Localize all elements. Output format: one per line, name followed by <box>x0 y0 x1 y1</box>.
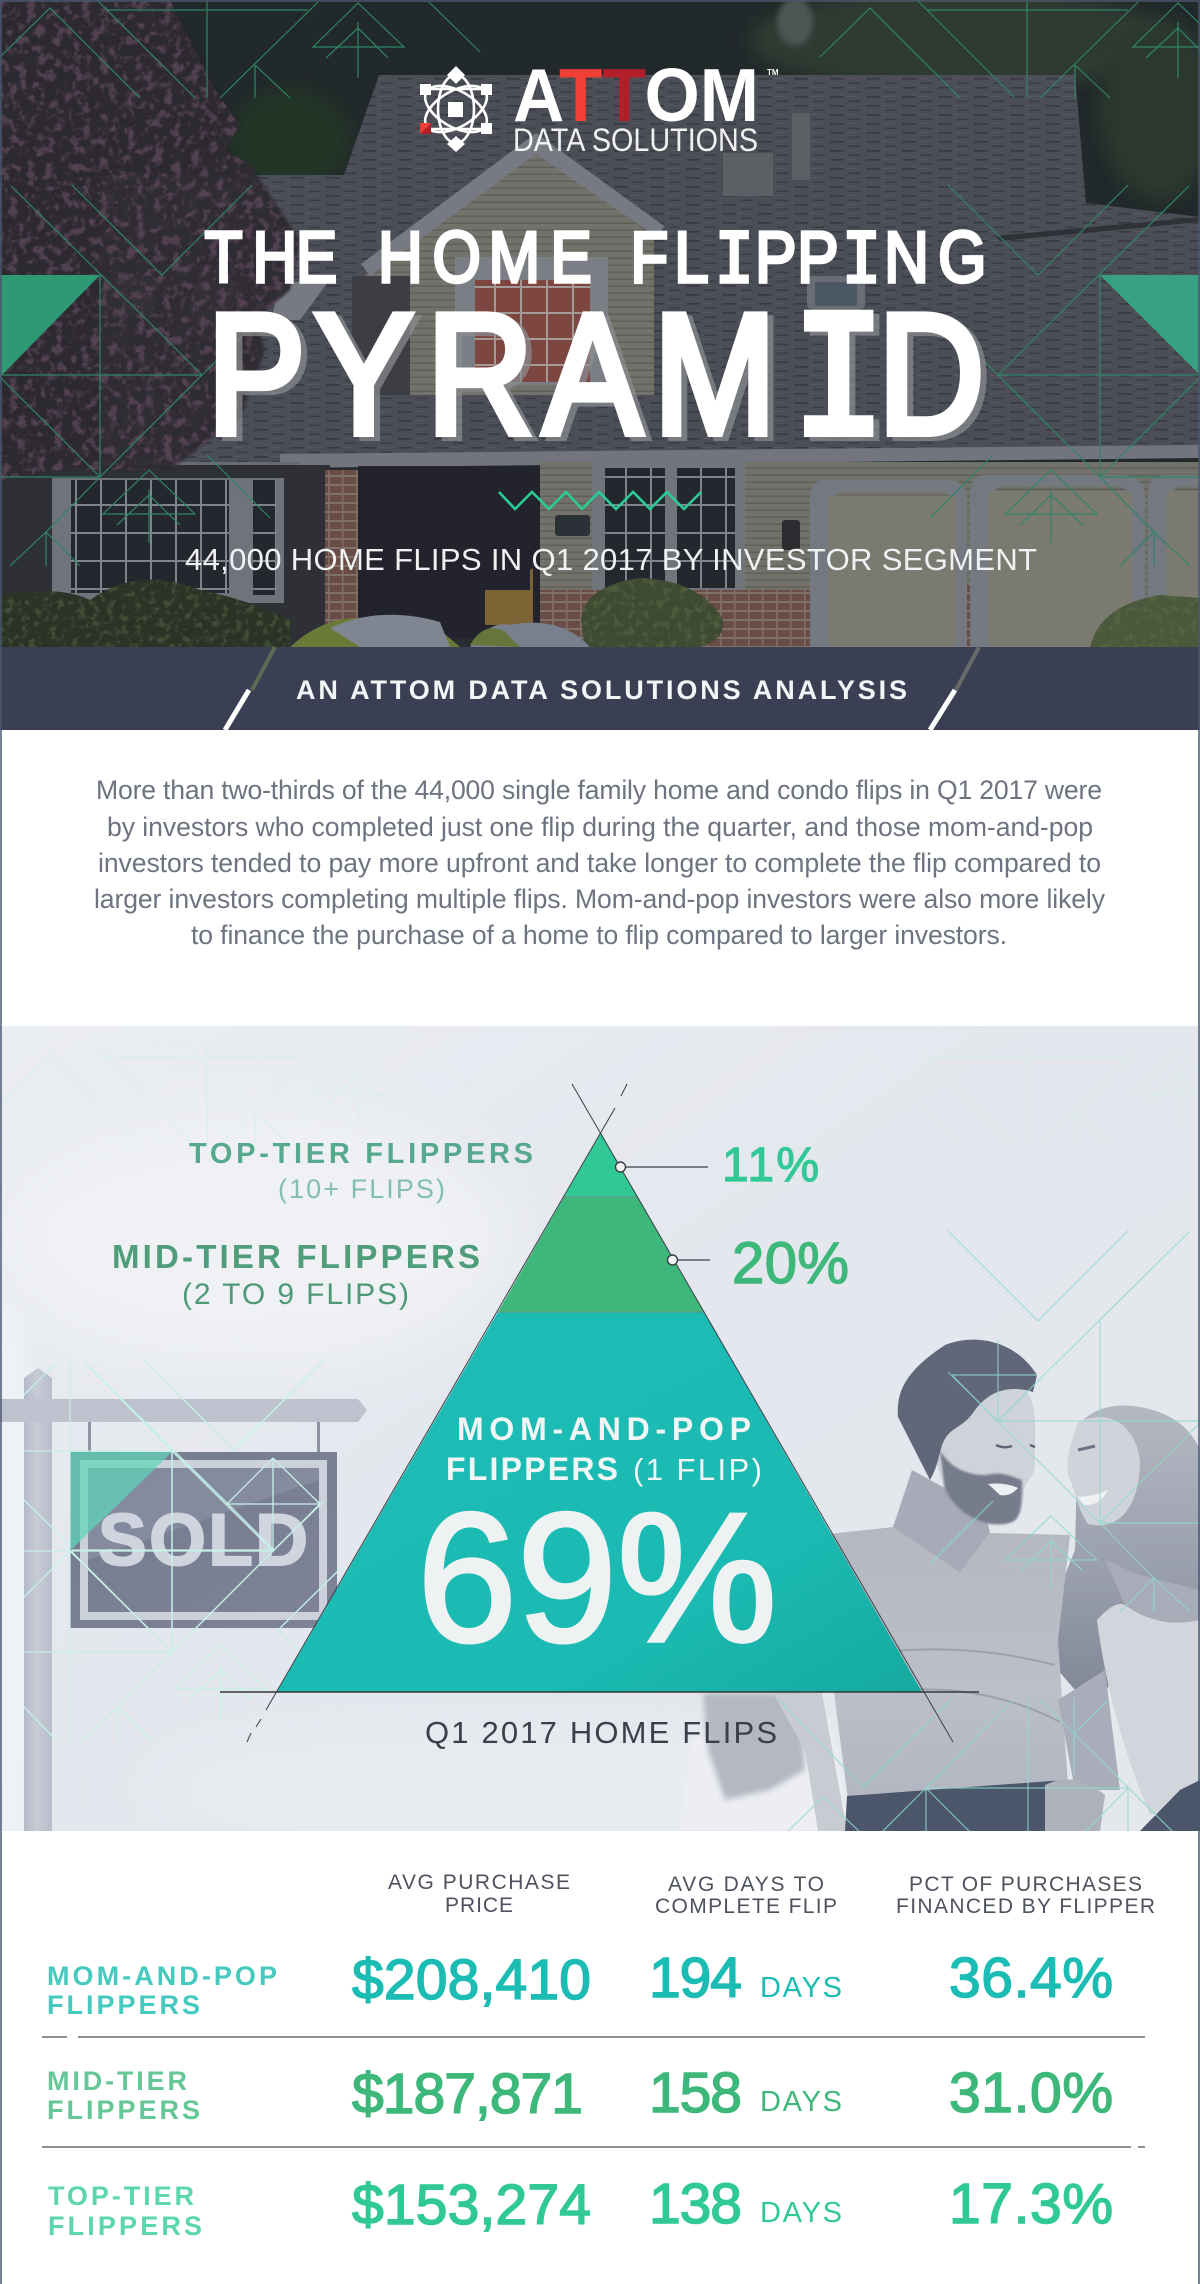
man's neck <box>893 1470 990 1573</box>
man's smile <box>988 1484 1018 1495</box>
title line one: FL <box>630 218 709 298</box>
top tier percent: 11% <box>722 1139 819 1192</box>
pyramid chart <box>220 1084 979 1742</box>
central window <box>455 257 608 385</box>
title line two: PYRAM <box>207 279 776 469</box>
avg days: DAYS <box>760 2197 842 2229</box>
column header: days <box>655 1873 837 1918</box>
woman's brow and smile <box>1078 1446 1095 1450</box>
column header: financed: FINANCED BY FLIPPER <box>896 1895 1155 1918</box>
avg days <box>649 2061 842 2125</box>
icon: ATTOM atom mark <box>418 66 494 152</box>
woman's chest <box>1105 1560 1200 1623</box>
man's shirt <box>820 1527 1070 1800</box>
avg days <box>649 1946 842 2010</box>
man's hand <box>703 1693 805 1800</box>
stats table <box>42 1871 1155 2241</box>
title line two: I <box>792 282 885 488</box>
pyramid mom-and-pop label: (1 FLIP) <box>633 1452 762 1487</box>
row label: FLIPPERS <box>48 2211 202 2241</box>
sign arm <box>0 1399 367 1422</box>
sign word: SOLD <box>98 1500 308 1581</box>
sofa <box>680 1713 850 1831</box>
panel background <box>0 1026 1200 1831</box>
header photo: house with trees <box>0 0 1200 647</box>
row label: FLIPPERS <box>47 1990 200 2020</box>
soft glow background <box>0 1110 850 1900</box>
pct financed: 17.3% <box>949 2172 1113 2236</box>
row label: TOP-TIER <box>48 2181 194 2211</box>
left dormer skylights <box>273 282 326 320</box>
row label: MID-TIER <box>47 2066 187 2096</box>
title line one: I <box>842 220 881 306</box>
teal corner <box>70 1452 172 1551</box>
woman's top <box>1097 1604 1200 1815</box>
intro paragraph: larger investors completing multiple flips. Mom-and-pop investors were also more likely <box>94 884 1106 914</box>
column header: price: AVG PURCHASE <box>388 1871 570 1894</box>
column header: financed <box>896 1873 1155 1918</box>
sign board <box>70 1452 337 1628</box>
bottom tier: mom-and-pop <box>277 1312 922 1692</box>
brick base <box>540 590 810 647</box>
decorative green triangle right <box>1100 275 1200 375</box>
callout: top tier dot <box>616 1162 708 1172</box>
pyramid big percent: 69% <box>417 1474 777 1680</box>
mid tier label <box>112 1238 480 1311</box>
callout: mid tier dot <box>668 1255 710 1265</box>
left windows <box>52 478 284 603</box>
upper roof <box>100 75 1200 465</box>
woman's face <box>1067 1417 1140 1525</box>
title line one: HOME <box>378 218 592 298</box>
title line one: I <box>715 220 754 306</box>
middle tier <box>498 1197 704 1312</box>
tier separators <box>498 1197 704 1312</box>
avg days: 138 <box>649 2172 742 2236</box>
avg price: $187,871 <box>352 2062 583 2126</box>
gable wall <box>352 152 654 395</box>
geometric line pattern <box>0 0 1200 566</box>
man's beard <box>940 1450 1022 1524</box>
garage doors <box>810 480 967 647</box>
subtitle: 44,000 HOME FLIPS IN Q1 2017 BY INVESTOR SEGMENT <box>185 542 1037 577</box>
avg price: $153,274 <box>352 2173 591 2237</box>
brick column <box>325 470 358 624</box>
divider one <box>42 2036 1145 2038</box>
mailbox <box>555 515 590 536</box>
column header: financed: PCT OF PURCHASES <box>909 1873 1142 1896</box>
woman's arm <box>1058 1670 1120 1790</box>
shrubs <box>0 580 290 647</box>
mid tier label: (2 TO 9 FLIPS) <box>182 1278 409 1311</box>
pyramid caption: Q1 2017 HOME FLIPS <box>425 1715 777 1750</box>
right window <box>592 462 745 594</box>
header panel <box>0 0 1200 730</box>
logo wordmark: ATTOM <box>513 53 759 137</box>
intro paragraph: to finance the purchase of a home to flip compared to larger investors. <box>191 920 1007 950</box>
small round window <box>807 276 865 310</box>
row label: FLIPPERS <box>47 2095 200 2125</box>
avg days: DAYS <box>760 1972 842 2004</box>
sign post <box>24 1368 52 1831</box>
logo <box>418 53 779 158</box>
man's eyes <box>996 1445 1035 1447</box>
logo trademark: TM <box>767 68 779 77</box>
avg days <box>649 2172 842 2236</box>
photo: couple <box>680 1340 1200 1831</box>
pyramid mom-and-pop label <box>446 1411 762 1487</box>
intro paragraph: More than two-thirds of the 44,000 single family home and condo flips in Q1 2017 were <box>96 775 1102 805</box>
title line one: THE <box>205 218 337 298</box>
man's ear <box>919 1422 939 1458</box>
left tree foliage <box>0 0 300 480</box>
column header: price: PRICE <box>445 1894 513 1917</box>
title line one: NG <box>884 218 986 298</box>
chair blanket <box>773 1693 847 1831</box>
row label <box>47 2066 200 2125</box>
title line one: PP <box>755 218 839 298</box>
pyramid panel <box>0 1026 1200 1900</box>
woman's back hair <box>1058 1406 1200 1690</box>
mid tier percent: 20% <box>732 1231 849 1296</box>
house front wall <box>330 468 474 647</box>
row: top-tier <box>48 2172 1113 2241</box>
gutter <box>280 445 1200 468</box>
pct financed: 36.4% <box>949 1946 1113 2010</box>
top tier label <box>189 1138 533 1204</box>
man's face <box>937 1389 1036 1522</box>
pyramid mom-and-pop label: FLIPPERS <box>446 1451 618 1487</box>
man's hair <box>898 1340 1037 1480</box>
analysis banner <box>0 647 1200 730</box>
divider two <box>42 2146 1145 2148</box>
column header: days: AVG DAYS TO <box>668 1873 824 1896</box>
column header: price <box>388 1871 570 1917</box>
intro paragraph: by investors who completed just one flip during the quarter, and those mom-and-pop <box>107 812 1093 842</box>
bench <box>485 568 533 625</box>
sign hangers <box>88 1422 320 1452</box>
title line two: D <box>878 279 984 469</box>
lamp <box>782 520 800 550</box>
logo tagline: DATA SOLUTIONS <box>513 122 758 158</box>
pyramid mom-and-pop label: MOM-AND-POP <box>457 1411 751 1447</box>
row label <box>47 1961 277 2020</box>
geometric line pattern <box>0 1047 1200 1832</box>
sold sign <box>0 1368 367 1831</box>
top tier <box>564 1133 638 1197</box>
avg price: $208,410 <box>352 1948 591 2012</box>
roof vent and pipe <box>723 113 810 196</box>
mid tier label: MID-TIER FLIPPERS <box>112 1238 480 1275</box>
column header: days: COMPLETE FLIP <box>655 1895 837 1918</box>
banner slashes <box>252 647 275 690</box>
front door and porch <box>358 466 540 638</box>
pyramid outline lines <box>572 1084 953 1742</box>
avg days: DAYS <box>760 2086 842 2118</box>
row: mid-tier <box>47 2061 1113 2126</box>
jeans <box>845 1780 1058 1831</box>
row label: MOM-AND-POP <box>47 1961 277 1991</box>
top tier label: TOP-TIER FLIPPERS <box>189 1138 533 1170</box>
hands <box>1045 1779 1105 1831</box>
intro paragraph <box>94 775 1106 950</box>
banner text: AN ATTOM DATA SOLUTIONS ANALYSIS <box>296 675 907 705</box>
decorative green triangle left <box>0 275 100 377</box>
avg days: 194 <box>649 1946 742 2010</box>
zigzag divider <box>499 492 701 509</box>
pct financed: 31.0% <box>949 2061 1113 2125</box>
row label <box>48 2181 202 2241</box>
top tier label: (10+ FLIPS) <box>278 1174 445 1204</box>
avg days: 158 <box>649 2061 742 2125</box>
intro paragraph: investors tended to pay more upfront and take longer to complete the flip compared to <box>98 848 1101 878</box>
row: mom-and-pop <box>47 1946 1113 2020</box>
